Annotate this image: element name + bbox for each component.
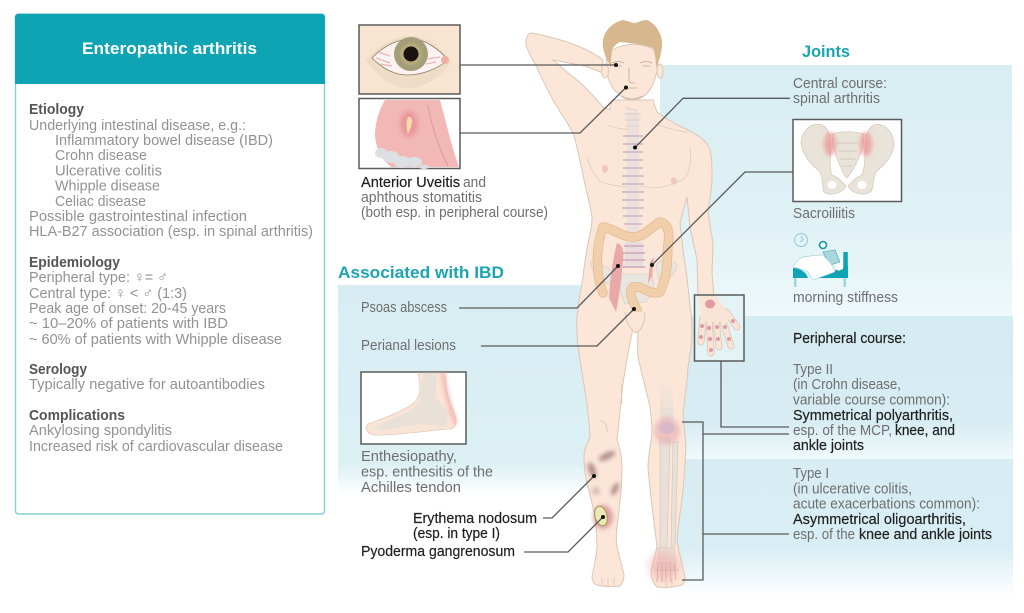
text block: type I: (in ulcerative colitis, bbox=[793, 480, 912, 498]
label: erythema nodosum: Erythema nodosum bbox=[413, 510, 537, 527]
psoas muscle bbox=[609, 243, 654, 312]
text: enthesiopathy: Achilles tendon bbox=[361, 479, 461, 496]
callout: anterior uveitis eye image bbox=[359, 25, 460, 94]
text block: type I bbox=[793, 465, 992, 543]
text block: etiology: Inflammatory bowel disease (IBD) bbox=[55, 132, 273, 149]
label: morning stiffness: morning stiffness bbox=[793, 289, 898, 306]
right leg bones bbox=[658, 380, 678, 568]
text block: complications bbox=[29, 407, 283, 455]
panel: joints background bbox=[660, 65, 1013, 596]
text block: type II: (in Crohn disease, bbox=[793, 376, 901, 393]
text block: type II bbox=[793, 361, 955, 454]
callout: sacroiliitis pelvis image bbox=[793, 120, 902, 202]
text block: etiology: Celiac disease bbox=[55, 193, 146, 210]
panel header bbox=[15, 14, 325, 84]
palm bbox=[698, 296, 728, 322]
text block: complications: Ankylosing spondylitis bbox=[29, 422, 172, 439]
label: central course bbox=[793, 75, 887, 107]
icon: bed frame bbox=[793, 252, 848, 287]
text block: etiology: HLA-B27 association (esp. in spinal arthritis) bbox=[29, 223, 313, 240]
icon: blanket bbox=[793, 255, 835, 280]
text block: type II: esp. of the MCP, bbox=[793, 422, 892, 439]
text block: type I: esp. of the bbox=[793, 526, 855, 543]
text block: etiology: Etiology bbox=[29, 101, 85, 118]
erythema nodosum lesions bbox=[586, 449, 621, 497]
text: anterior uveitis label bbox=[361, 174, 548, 221]
neck and face bbox=[607, 44, 658, 100]
label: erythema nodosum: (esp. in type I) bbox=[413, 525, 500, 542]
text block: type I: knee and ankle joints bbox=[859, 526, 992, 543]
pyoderma gangrenosum lesion bbox=[593, 505, 613, 529]
text block: complications: Complications bbox=[29, 407, 125, 424]
heading: Joints: Joints bbox=[802, 42, 850, 61]
label: perianal lesions: Perianal lesions bbox=[361, 337, 456, 354]
text block: etiology: Crohn disease bbox=[55, 147, 147, 164]
colon bbox=[597, 222, 669, 310]
text: enthesiopathy bbox=[361, 448, 493, 496]
ear bbox=[602, 64, 663, 78]
label: pyoderma gangrenosum: Pyoderma gangrenosum bbox=[361, 543, 515, 560]
text block: epidemiology: Epidemiology bbox=[29, 254, 121, 271]
pectoral lines bbox=[587, 124, 691, 188]
text block: etiology: Underlying intestinal disease, e.g.: bbox=[29, 117, 246, 134]
facial features bbox=[612, 62, 652, 99]
text block: type I: Asymmetrical oligoarthritis, bbox=[793, 511, 966, 528]
toes bbox=[600, 384, 672, 586]
icon: clock bbox=[794, 234, 808, 246]
fingers fill bbox=[701, 312, 737, 353]
text block: type I: acute exacerbations common): bbox=[793, 496, 980, 512]
panel: enteropathic arthritis summary bbox=[15, 14, 325, 514]
heading: Enteropathic arthritis: Enteropathic arthritis bbox=[82, 39, 257, 58]
pelvis bones bbox=[590, 260, 677, 304]
callout: enthesiopathy foot image bbox=[361, 372, 466, 444]
text: anterior uveitis label: aphthous stomatitis bbox=[361, 189, 482, 206]
text block: type II: knee, and bbox=[895, 422, 955, 439]
icon: morning stiffness bed and clock bbox=[793, 234, 848, 287]
text block: etiology: Whipple disease bbox=[55, 178, 160, 194]
genitals bbox=[625, 312, 645, 333]
text block: epidemiology: ~ 60% of patients with Whipple disease bbox=[29, 331, 282, 348]
text: enthesiopathy: Enthesiopathy, bbox=[361, 448, 457, 465]
label: sacroiliitis: Sacroiliitis bbox=[793, 205, 855, 222]
spine bbox=[622, 108, 645, 268]
text block: epidemiology: Peripheral type: ♀= ♂ bbox=[29, 269, 168, 286]
text: enthesiopathy: esp. enthesitis of the bbox=[361, 464, 493, 480]
label: central course: spinal arthritis bbox=[793, 90, 880, 107]
callout: aphthous stomatitis mouth image bbox=[359, 98, 460, 169]
panel: associated with IBD background bbox=[338, 285, 600, 495]
inflamed ankle bbox=[649, 551, 679, 582]
text block: complications: Increased risk of cardiovascular disease bbox=[29, 438, 283, 455]
inflamed knee bbox=[654, 417, 680, 445]
text block: type II: Symmetrical polyarthritis, bbox=[793, 407, 953, 424]
raised arm and torso bbox=[526, 33, 714, 587]
text block: epidemiology: Peak age of onset: 20-45 years bbox=[29, 300, 226, 317]
callout: hand image bbox=[694, 295, 744, 361]
text block: etiology: Ulcerative colitis bbox=[55, 162, 162, 180]
text block: serology: Serology bbox=[29, 361, 88, 378]
label: erythema nodosum bbox=[413, 510, 537, 542]
text block: serology: Typically negative for autoantibodies bbox=[29, 376, 265, 393]
label: central course: Central course: bbox=[793, 75, 887, 92]
hair bbox=[603, 20, 662, 68]
body illustration bbox=[526, 20, 714, 587]
text block: type II: Type II bbox=[793, 361, 833, 378]
fingers outline bbox=[701, 312, 737, 353]
text block: etiology bbox=[29, 101, 313, 240]
text: anterior uveitis label: Anterior Uveitis bbox=[361, 174, 460, 191]
text block: type II: ankle joints bbox=[793, 437, 864, 454]
text block: type I: Type I bbox=[793, 465, 829, 482]
text: anterior uveitis label: (both esp. in peripheral course) bbox=[361, 204, 548, 221]
text block: etiology: Possible gastrointestinal infection bbox=[29, 208, 247, 225]
text: anterior uveitis label: and bbox=[463, 174, 486, 191]
text block: peripheral course heading: Peripheral course: bbox=[793, 330, 906, 347]
chest nipples bbox=[602, 165, 677, 184]
text block: type II: variable course common): bbox=[793, 392, 950, 408]
text block: serology bbox=[29, 361, 265, 393]
icon: pillow bbox=[835, 258, 843, 271]
text block: epidemiology: ~ 10–20% of patients with IBD bbox=[29, 315, 228, 332]
label: psoas abscess: Psoas abscess bbox=[361, 299, 447, 316]
text block: epidemiology bbox=[29, 254, 282, 348]
text block: epidemiology: Central type: ♀ < ♂ (1:3) bbox=[29, 285, 187, 302]
leader lines bbox=[459, 63, 793, 580]
icon: person bbox=[820, 242, 840, 265]
heading: Associated with IBD: Associated with IBD bbox=[338, 263, 504, 282]
